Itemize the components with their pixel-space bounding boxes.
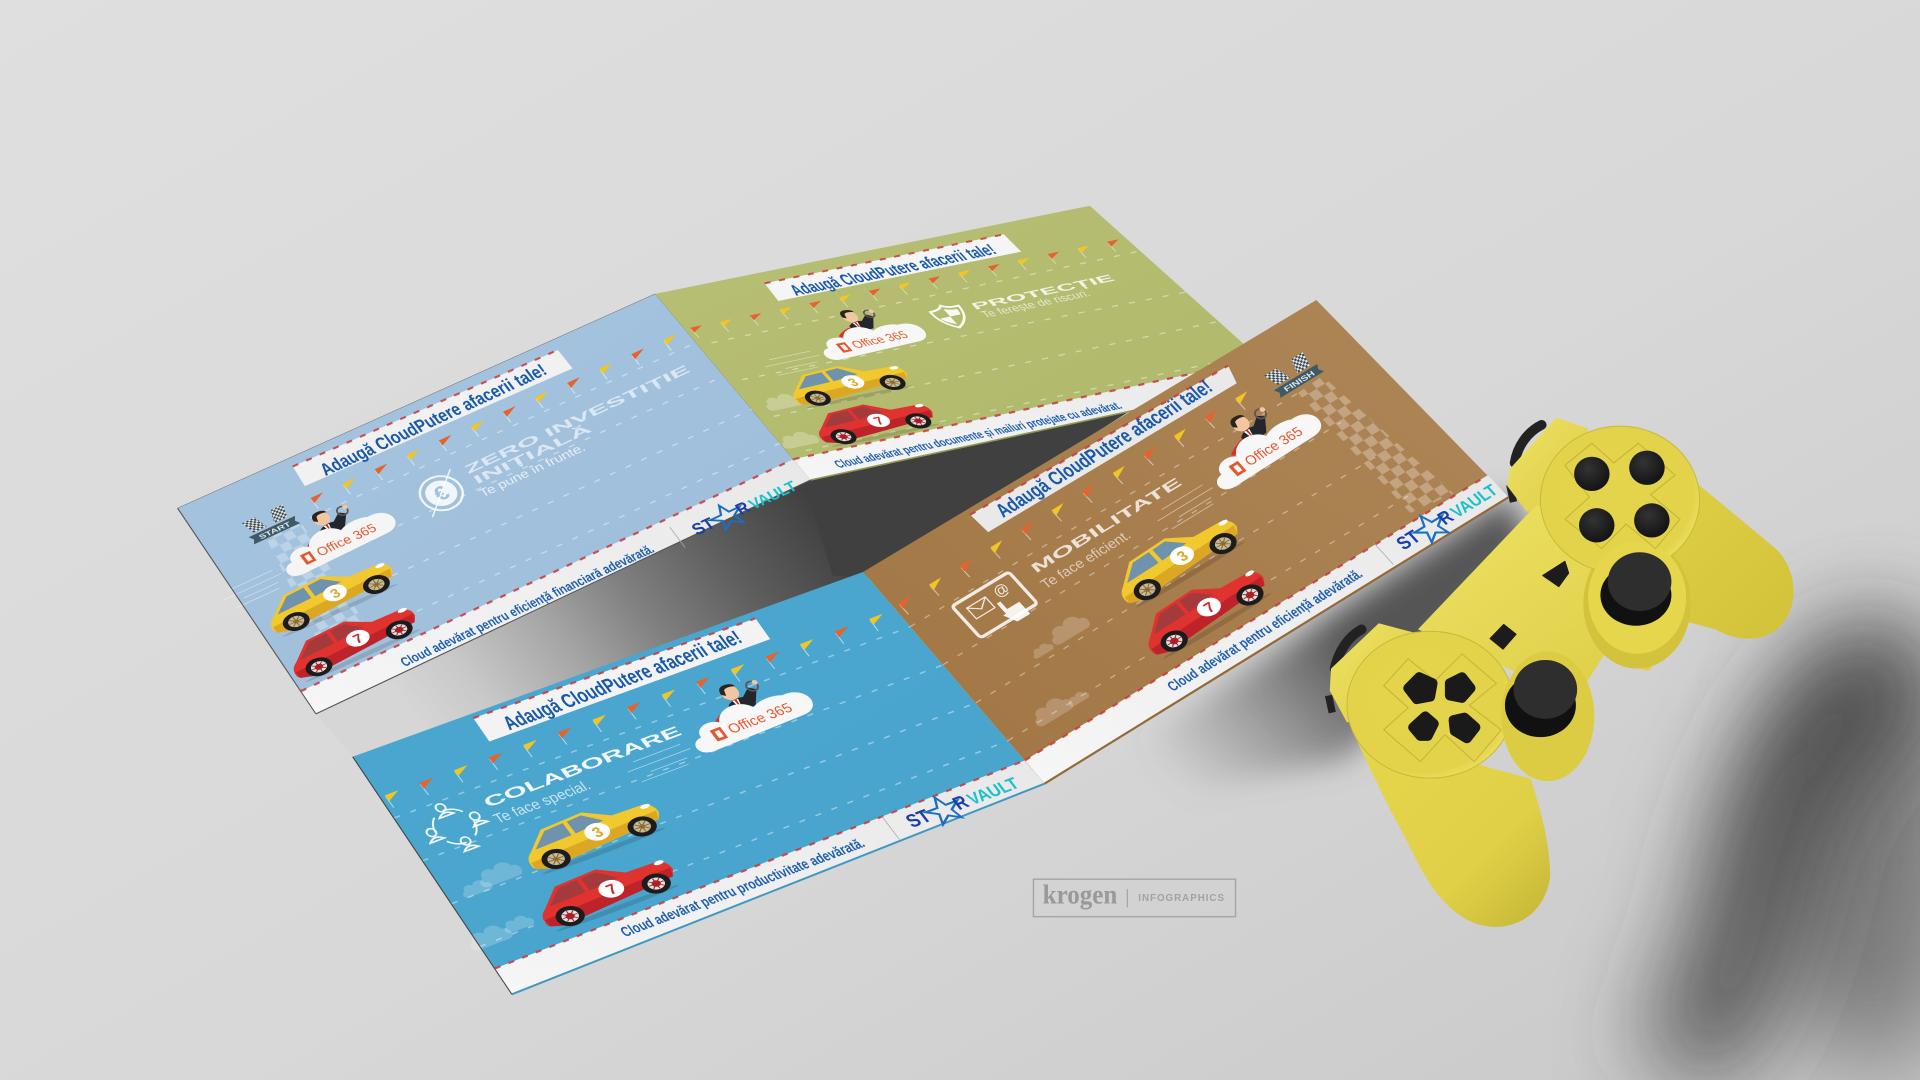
office 365 cloud [1140,403,1331,532]
title: colaborare [480,724,685,827]
panel background [655,206,1282,480]
left disc [1347,631,1513,778]
header label [473,618,770,742]
right shoulder button [1507,418,1588,512]
left grip [1352,730,1550,927]
select button [1490,624,1516,649]
panel: protectie (green) [655,206,1282,480]
flag row [898,391,1257,614]
panel: mobilitate (brown) [863,300,1509,784]
shadow under brown card [1078,496,1531,802]
checkered finish strip [1298,376,1453,513]
red car 7: 7 [870,414,888,427]
krogen infographics logo: INFOGRAPHICS [1138,893,1224,904]
driver [696,675,773,723]
d-pad etching [1384,654,1501,762]
yellow car 3 [776,355,918,410]
icon: collaboration circle [409,793,500,860]
starvault logo: R [949,792,974,814]
title: mobilitate: Te face eficient. [1038,528,1135,592]
starvault logo: R [1433,507,1458,529]
icon: euro: € [428,481,454,505]
title: zero investitie: ZERO INVESTIȚIE [461,362,693,476]
lane dashes [310,343,780,626]
left stick [1505,660,1577,737]
footer band: Cloud adevărat pentru documente și mailuri protejate cu adevărat. [830,399,1125,470]
controller body [1418,504,1680,686]
left stick ring [1501,651,1594,781]
yellow car 3: 3 [589,824,607,841]
d-pad buttons [1408,677,1476,738]
starvault logo: VAULT [746,478,801,513]
title: protectie [969,273,1118,320]
finish banner: FINISH [1282,369,1317,393]
panel background [178,294,811,714]
face buttons [1574,451,1670,542]
office 365 cloud [749,316,935,376]
starvault logo [882,769,1025,841]
left shoulder button [1329,623,1420,722]
office 365 cloud [209,502,403,611]
footer band: Cloud adevărat pentru eficiență financiară adevărată. [398,542,658,670]
right grip [1641,482,1794,639]
start banner: START [257,520,293,541]
office 365 cloud: Office 365 [725,701,796,737]
lane dashes [910,393,1408,741]
yellow car 3: 3 [327,586,344,602]
red car 7 [802,393,944,449]
driver [820,305,889,338]
right disc [1540,426,1700,573]
starvault logo: ST [902,806,937,832]
icon: tablet with email [952,572,1041,642]
krogen infographics logo [1033,879,1236,917]
red car 7: 7 [1200,599,1219,617]
lane dashes [711,251,1261,451]
office 365 cloud: Office 365 [313,521,379,559]
office 365 cloud [612,681,822,784]
fold shadow under blue card [316,471,872,762]
starvault logo [670,473,802,548]
red car 7: 7 [603,881,622,898]
smoke puffs [457,858,536,952]
footer band [178,459,811,714]
panel background [863,300,1509,784]
lane dashes [394,627,1008,947]
panel: colaborare (blue) [353,572,1044,994]
controller cast shadow [1702,618,1920,1071]
right stick ring top [1588,541,1686,654]
finish banner [1262,351,1324,398]
panel: zero investitie (light blue) [178,294,811,714]
title: mobilitate: MOBILITATE [1028,475,1186,576]
starvault logo [1374,476,1505,565]
right stick ring [1583,539,1691,669]
smoke puffs [759,391,822,450]
icon: tablet with email: @ [989,580,1014,601]
footer band [793,359,1282,480]
header label: Adaugă CloudPutere afacerii tale! [316,361,551,480]
title: protectie: Te ferește de riscuri. [979,289,1094,320]
yellow car 3 [511,790,671,878]
red car 7 [278,596,426,685]
header label [765,234,1021,301]
header label: Adaugă CloudPutere afacerii tale! [785,241,1001,299]
icon: shield [927,302,975,330]
footer band [1025,475,1509,784]
footer band: Cloud adevărat pentru eficiență adevărată. [1165,567,1366,695]
yellow car 3: 3 [1173,548,1192,565]
title: colaborare: Te face special. [490,778,594,827]
yellow car 3 [1103,506,1250,611]
red car 7: 7 [350,631,367,647]
header label: Adaugă CloudPutere afacerii tale! [498,627,747,734]
footer band: Cloud adevărat pentru productivitate adevărată. [617,836,869,940]
flag row [385,614,892,808]
start banner [239,503,300,544]
title: zero investitie [461,362,693,500]
icon: euro [410,469,472,517]
starvault logo: VAULT [963,774,1023,808]
title: zero investitie: Te pune în frunte. [476,440,588,500]
right stick [1600,552,1671,626]
red car 7 [525,847,685,935]
title: protectie: PROTECȚIE [969,273,1118,312]
yellow car 3: 3 [844,376,862,389]
panel background [353,572,1044,994]
starvault logo: R [731,498,754,519]
yellow car 3 [256,550,403,640]
header label: Adaugă CloudPutere afacerii tale! [991,376,1217,522]
driver [291,500,361,548]
face button etching [1565,443,1680,549]
title: zero investitie: INIȚIALĂ [470,421,595,487]
starvault logo: VAULT [1446,480,1502,521]
title: colaborare: COLABORARE [480,724,685,811]
flag row [690,239,1128,338]
office 365 cloud: Office 365 [848,329,911,351]
driver [1210,402,1282,457]
starvault logo: ST [1392,527,1425,554]
title: mobilitate [1028,475,1186,592]
header label [970,366,1237,532]
red car 7 [1130,557,1277,662]
header label [293,350,573,486]
game controller [1329,418,1794,927]
smoke puffs [1027,611,1092,728]
starvault logo: ST [687,513,720,539]
flag row [310,334,684,509]
start button [1543,561,1569,587]
krogen infographics logo: krogen [1043,880,1117,910]
fold shadow under green card [802,382,1176,578]
office 365 cloud: Office 365 [1242,424,1307,469]
footer band [353,757,1044,994]
checkered start strip [264,520,373,667]
